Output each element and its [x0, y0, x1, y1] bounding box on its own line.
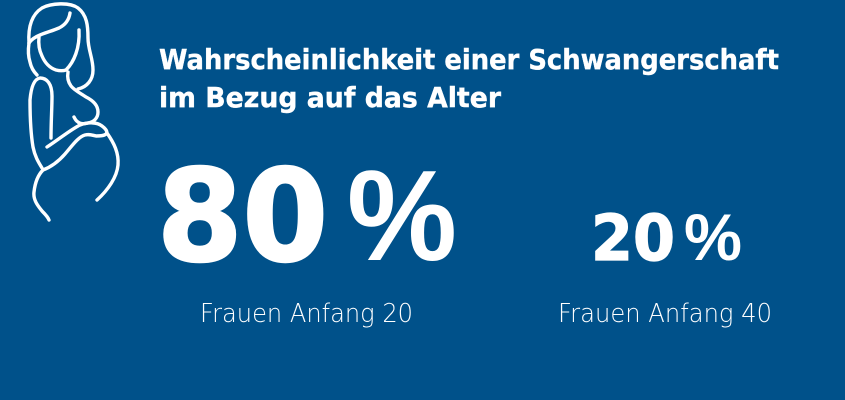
label: Frauen Anfang 20: Frauen Anfang 20	[200, 299, 413, 329]
title: Wahrscheinlichkeit einer Schwangerschaft	[159, 43, 779, 76]
statistic: 80 percent	[157, 142, 457, 290]
statistic: 80 percent: 80	[157, 142, 328, 290]
title: im Bezug auf das Alter	[159, 81, 501, 114]
statistic: 20 percent: 20	[591, 202, 675, 275]
title	[159, 43, 779, 114]
icon: pregnant woman line drawing	[28, 4, 118, 220]
statistic: 20 percent	[591, 200, 742, 275]
statistic: 80 percent: %	[347, 144, 457, 288]
label: Frauen Anfang 40: Frauen Anfang 40	[558, 299, 772, 329]
statistic: 20 percent: %	[684, 200, 742, 274]
